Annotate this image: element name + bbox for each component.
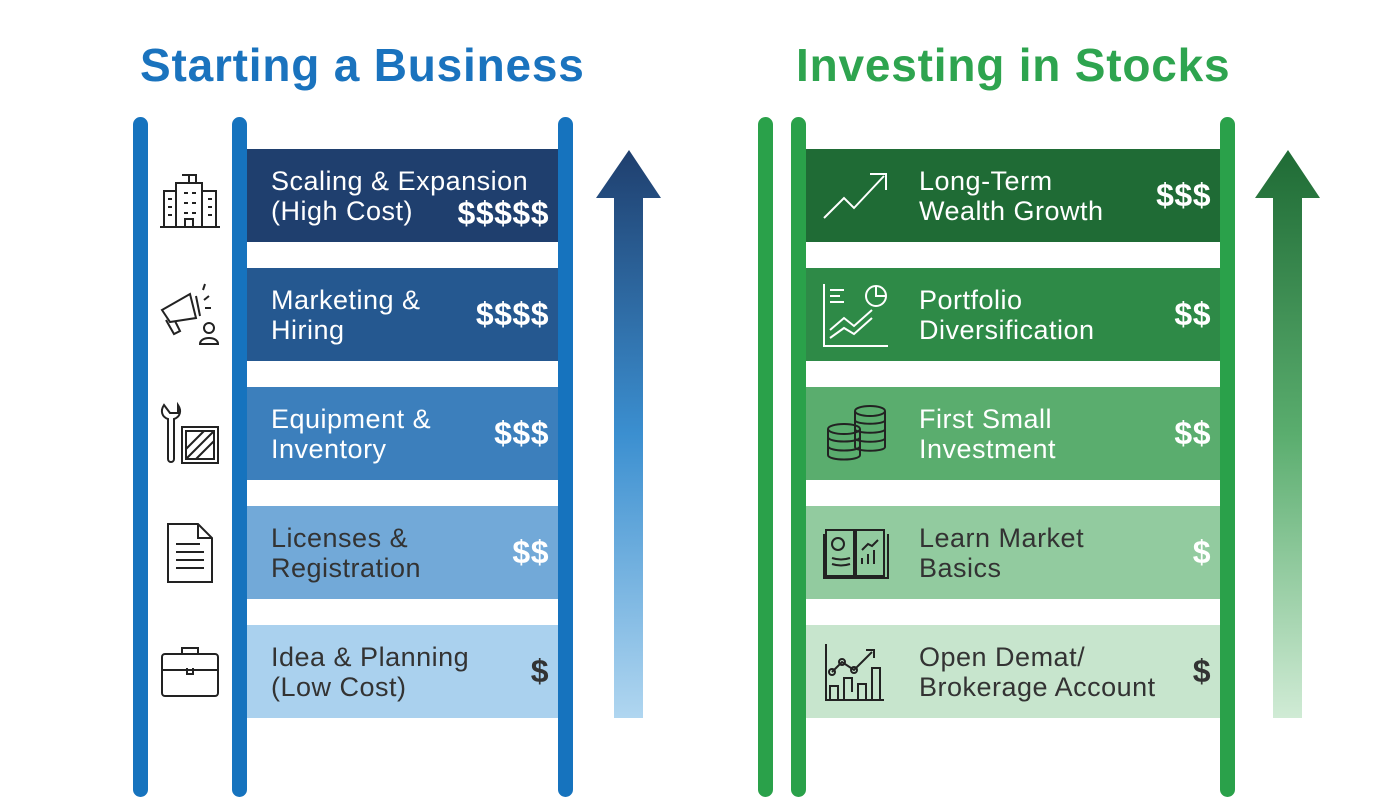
step: Equipment & Inventory bbox=[247, 387, 558, 480]
step: Portfolio Diversification: $$ bbox=[1174, 296, 1211, 332]
step: First Small Investment: $$ bbox=[1174, 415, 1211, 451]
title: Investing in Stocks: Investing in Stocks bbox=[796, 39, 1230, 91]
step: Licenses & Registration: $$ bbox=[512, 534, 549, 570]
step: Marketing & Hiring: Hiring bbox=[271, 314, 345, 344]
right rails bbox=[758, 117, 1235, 797]
step: Licenses & Registration: Registration bbox=[271, 552, 421, 582]
icon: coins bbox=[827, 405, 886, 460]
icon: building bbox=[160, 174, 220, 228]
step: Open Demat/Brokerage Account: Open Demat/ bbox=[919, 642, 1085, 672]
arrow: investing growth bbox=[1255, 150, 1320, 718]
step: Long-Term Wealth Growth: Long-Term bbox=[919, 166, 1053, 196]
icon: document bbox=[167, 523, 213, 583]
step: Licenses & Registration bbox=[247, 506, 558, 599]
step: Open Demat/Brokerage Account: $ bbox=[1193, 653, 1211, 689]
step: Scaling & Expansion bbox=[247, 149, 558, 242]
step: Idea & Planning bbox=[247, 625, 558, 718]
step: Portfolio Diversification: Portfolio bbox=[919, 284, 1023, 314]
icon: briefcase bbox=[161, 647, 219, 697]
arrow: business cost growth bbox=[596, 150, 661, 718]
icon: wrench and crate bbox=[160, 402, 219, 464]
step: Learn Market Basics: Learn Market bbox=[919, 522, 1084, 552]
step: Scaling & Expansion: (High Cost) bbox=[271, 196, 413, 226]
step: Portfolio Diversification: Diversification bbox=[919, 314, 1095, 344]
step: Long-Term Wealth Growth bbox=[806, 149, 1220, 242]
icon: trend arrow bbox=[823, 173, 887, 219]
step: Learn Market Basics: Basics bbox=[919, 552, 1002, 582]
panel: investing ladder bbox=[806, 149, 1220, 718]
icon: megaphone bbox=[160, 284, 219, 345]
step: First Small Investment bbox=[806, 387, 1220, 480]
step: Learn Market Basics: $ bbox=[1193, 534, 1211, 570]
icon: portfolio chart bbox=[823, 284, 888, 347]
step: Idea & Planning: (Low Cost) bbox=[271, 672, 407, 702]
step: Long-Term Wealth Growth: $$$ bbox=[1156, 177, 1211, 213]
step: First Small Investment: First Small bbox=[919, 404, 1052, 434]
left rails bbox=[133, 117, 573, 797]
step: Portfolio Diversification bbox=[806, 268, 1220, 361]
step: Learn Market Basics bbox=[806, 506, 1220, 599]
step: Scaling & Expansion: Scaling & Expansion bbox=[271, 166, 528, 196]
step: Idea & Planning: $ bbox=[531, 653, 549, 689]
step: Equipment & Inventory: $$$ bbox=[494, 415, 549, 451]
step: Marketing & Hiring bbox=[247, 268, 558, 361]
step: Marketing & Hiring: $$$$ bbox=[476, 296, 549, 332]
title: Starting a Business: Starting a Business bbox=[140, 39, 585, 91]
step: Marketing & Hiring: Marketing & bbox=[271, 284, 421, 314]
step: Licenses & Registration: Licenses & bbox=[271, 522, 408, 552]
panel: business ladder bbox=[247, 149, 558, 718]
step: Scaling & Expansion: $$$$$ bbox=[458, 195, 549, 231]
icon: line bar chart bbox=[825, 644, 884, 701]
step: Long-Term Wealth Growth: Wealth Growth bbox=[919, 196, 1104, 226]
step: Open Demat/Brokerage Account bbox=[806, 625, 1220, 718]
icon: book bbox=[823, 529, 889, 579]
step: Equipment & Inventory: Equipment & bbox=[271, 404, 431, 434]
step: Idea & Planning: Idea & Planning bbox=[271, 642, 469, 672]
step: Equipment & Inventory: Inventory bbox=[271, 434, 387, 464]
step: Open Demat/Brokerage Account: Brokerage Account bbox=[919, 672, 1156, 702]
step: First Small Investment: Investment bbox=[919, 434, 1056, 464]
